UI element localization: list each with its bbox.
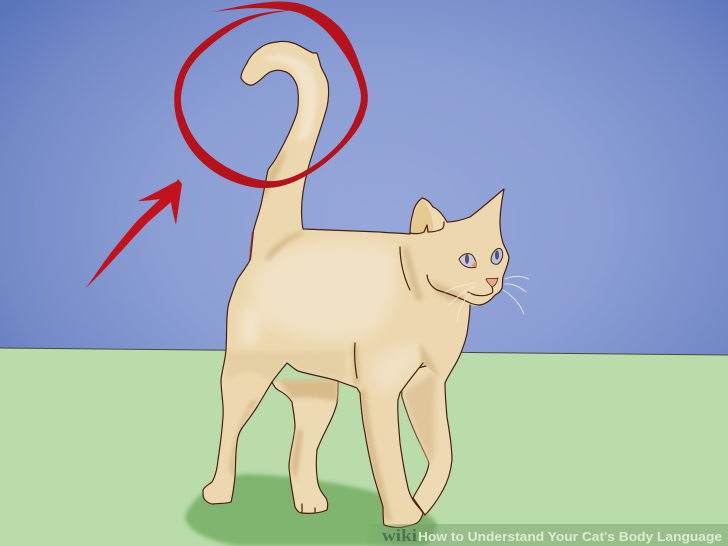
far rear leg — [272, 380, 338, 513]
far front leg — [402, 360, 452, 515]
cat outline — [203, 41, 509, 527]
watermark text — [382, 526, 722, 545]
grass ground — [0, 348, 728, 546]
watermark bar — [365, 524, 728, 546]
tail base dark line — [250, 232, 253, 260]
tail and body fold shading — [226, 148, 466, 520]
cat soft shading — [226, 55, 466, 520]
eye left — [459, 254, 477, 268]
body fold lines — [355, 247, 410, 378]
eye right — [491, 248, 503, 264]
chest highlight — [370, 342, 420, 392]
cat body, tail and head fill — [203, 41, 509, 527]
red arrow pointing to tail — [86, 179, 182, 288]
watermark text: wiki — [382, 526, 417, 545]
body highlight — [252, 241, 397, 340]
rear highlight — [240, 305, 262, 345]
cat — [203, 41, 529, 527]
tail highlight — [262, 55, 317, 140]
whiskers — [445, 276, 529, 322]
nose and mouth — [427, 275, 498, 305]
inner ear — [410, 200, 444, 234]
ground shadow — [185, 474, 437, 546]
red circle around tail — [174, 2, 368, 188]
sky background — [0, 0, 728, 356]
watermark text: How to Understand Your Cat's Body Language — [418, 529, 722, 544]
